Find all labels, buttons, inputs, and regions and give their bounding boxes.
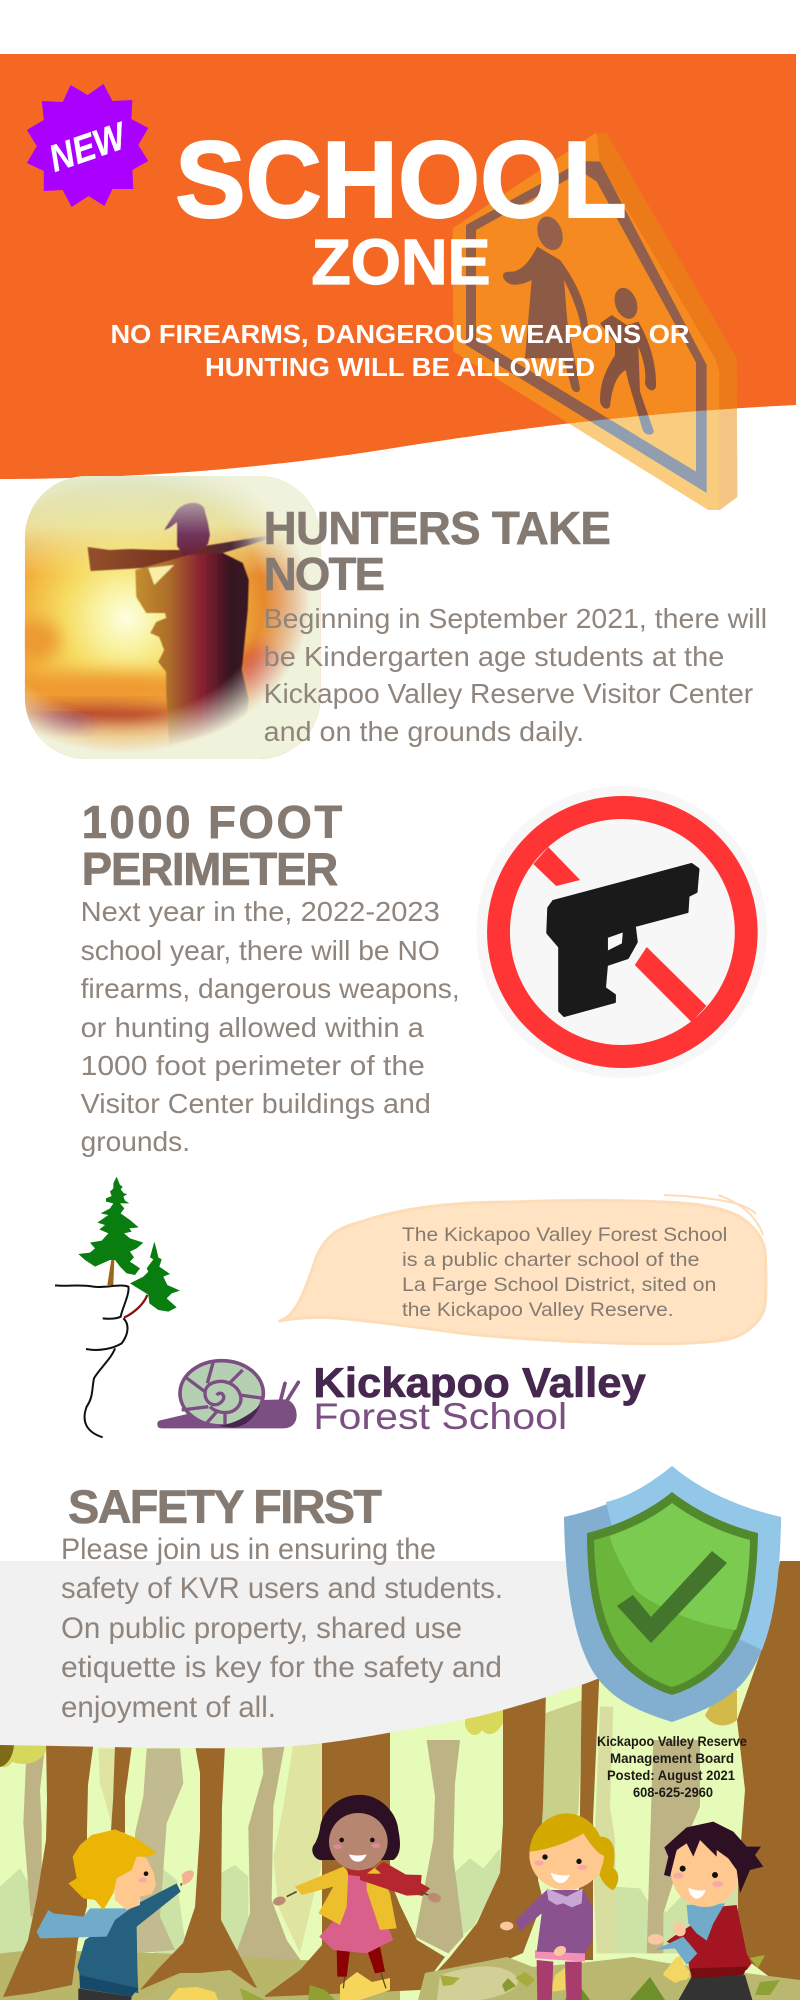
text block: and on the grounds daily.: [264, 716, 584, 747]
text block: [402, 1225, 727, 1321]
text block: La Farge School District, sited on: [402, 1275, 716, 1296]
text block: board credit: Management Board: [610, 1750, 734, 1766]
text block: or hunting allowed within a: [81, 1012, 424, 1043]
heading: 1000 FOOT: [82, 796, 342, 848]
text block: safety: etiquette is key for the safety and: [61, 1651, 502, 1684]
logo text: Kickapoo Valley Forest School: Forest School: [313, 1396, 567, 1437]
heading: safety first: SAFETY FIRST: [68, 1480, 382, 1533]
icon: pine trees on cliff: [55, 1177, 180, 1437]
text block: The Kickapoo Valley Forest School: [402, 1225, 727, 1246]
text block: [81, 896, 460, 1157]
title: SCHOOL: [175, 120, 627, 241]
far trees and bushes (left): [0, 1740, 400, 2000]
ground and fallen leaves: [140, 1955, 800, 2000]
child: scarf end and right hand of girl: [360, 1873, 442, 1904]
text block: board credit: Posted: August 2021: [607, 1767, 735, 1783]
heading: NOTE: [264, 548, 385, 600]
text block: board credit: 608-625-2960: [633, 1784, 713, 1800]
text block: safety: Please join us in ensuring the: [61, 1533, 436, 1566]
icon: safety shield: [564, 1466, 781, 1722]
header: orange banner: [0, 54, 796, 479]
icon: no guns sign: [477, 786, 767, 1078]
subtitle: ZONE: [311, 226, 491, 298]
badge: NEW: [27, 84, 148, 207]
logo text: Kickapoo Valley Forest School: Kickapoo Valley: [313, 1359, 646, 1406]
foreground trees: [3, 1561, 800, 2000]
text block: the Kickapoo Valley Reserve.: [402, 1300, 674, 1321]
far trees and bushes (right): [415, 1700, 747, 1953]
badge: NEW: NEW: [44, 115, 134, 181]
banner text: [110, 321, 690, 382]
text block: board credit: Kickapoo Valley Reserve: [597, 1733, 747, 1749]
heading: [82, 796, 342, 895]
child: boy in red sweater: [648, 1822, 763, 2000]
text block: Beginning in September 2021, there will: [264, 603, 767, 634]
child: blond boy in blue: [37, 1829, 194, 2000]
text block: safety: On public property, shared use: [61, 1612, 462, 1645]
panel: hunters take note: [264, 502, 767, 747]
child: girl in yellow jacket: [272, 1795, 430, 1988]
text block: 1000 foot perimeter of the: [81, 1050, 425, 1081]
text block: safety: [61, 1533, 503, 1724]
text block: board credit: [597, 1733, 747, 1800]
text block: [264, 603, 767, 747]
main content scaled to reference width: [5, 84, 767, 1437]
illustration: forest with children: [0, 1561, 800, 2000]
text block: be Kindergarten age students at the: [264, 641, 724, 672]
icon: school crossing sign (tinted over banner): [452, 133, 737, 424]
text block: safety: safety of KVR users and students.: [61, 1572, 503, 1605]
logo text: Kickapoo Valley Forest School: [313, 1359, 646, 1437]
heading: HUNTERS TAKE: [264, 502, 611, 554]
text block: firearms, dangerous weapons,: [81, 973, 460, 1004]
text block: grounds.: [81, 1126, 190, 1157]
banner text: HUNTING WILL BE ALLOWED: [205, 354, 595, 382]
text block: Next year in the, 2022-2023: [81, 896, 440, 927]
callout: forest school speech bubble: [280, 1195, 766, 1344]
heading: [264, 502, 611, 600]
photo: hunter silhouette at sunset: [5, 476, 320, 759]
panel: grey safety band: [0, 1561, 720, 1748]
text block: safety: enjoyment of all.: [61, 1691, 276, 1724]
icon: school crossing sign (part below banner): [453, 133, 737, 510]
foliage: [0, 1690, 737, 1767]
panel: 1000 foot perimeter: [81, 796, 460, 1157]
text block: Kickapoo Valley Reserve Visitor Center: [264, 678, 753, 709]
icon: snail: [157, 1361, 298, 1428]
banner text: NO FIREARMS, DANGEROUS WEAPONS OR: [110, 321, 690, 349]
child: blonde girl in purple: [500, 1813, 618, 2000]
heading: PERIMETER: [82, 843, 338, 895]
text block: is a public charter school of the: [402, 1250, 699, 1271]
text block: Visitor Center buildings and: [81, 1088, 431, 1119]
text block: school year, there will be NO: [81, 935, 440, 966]
